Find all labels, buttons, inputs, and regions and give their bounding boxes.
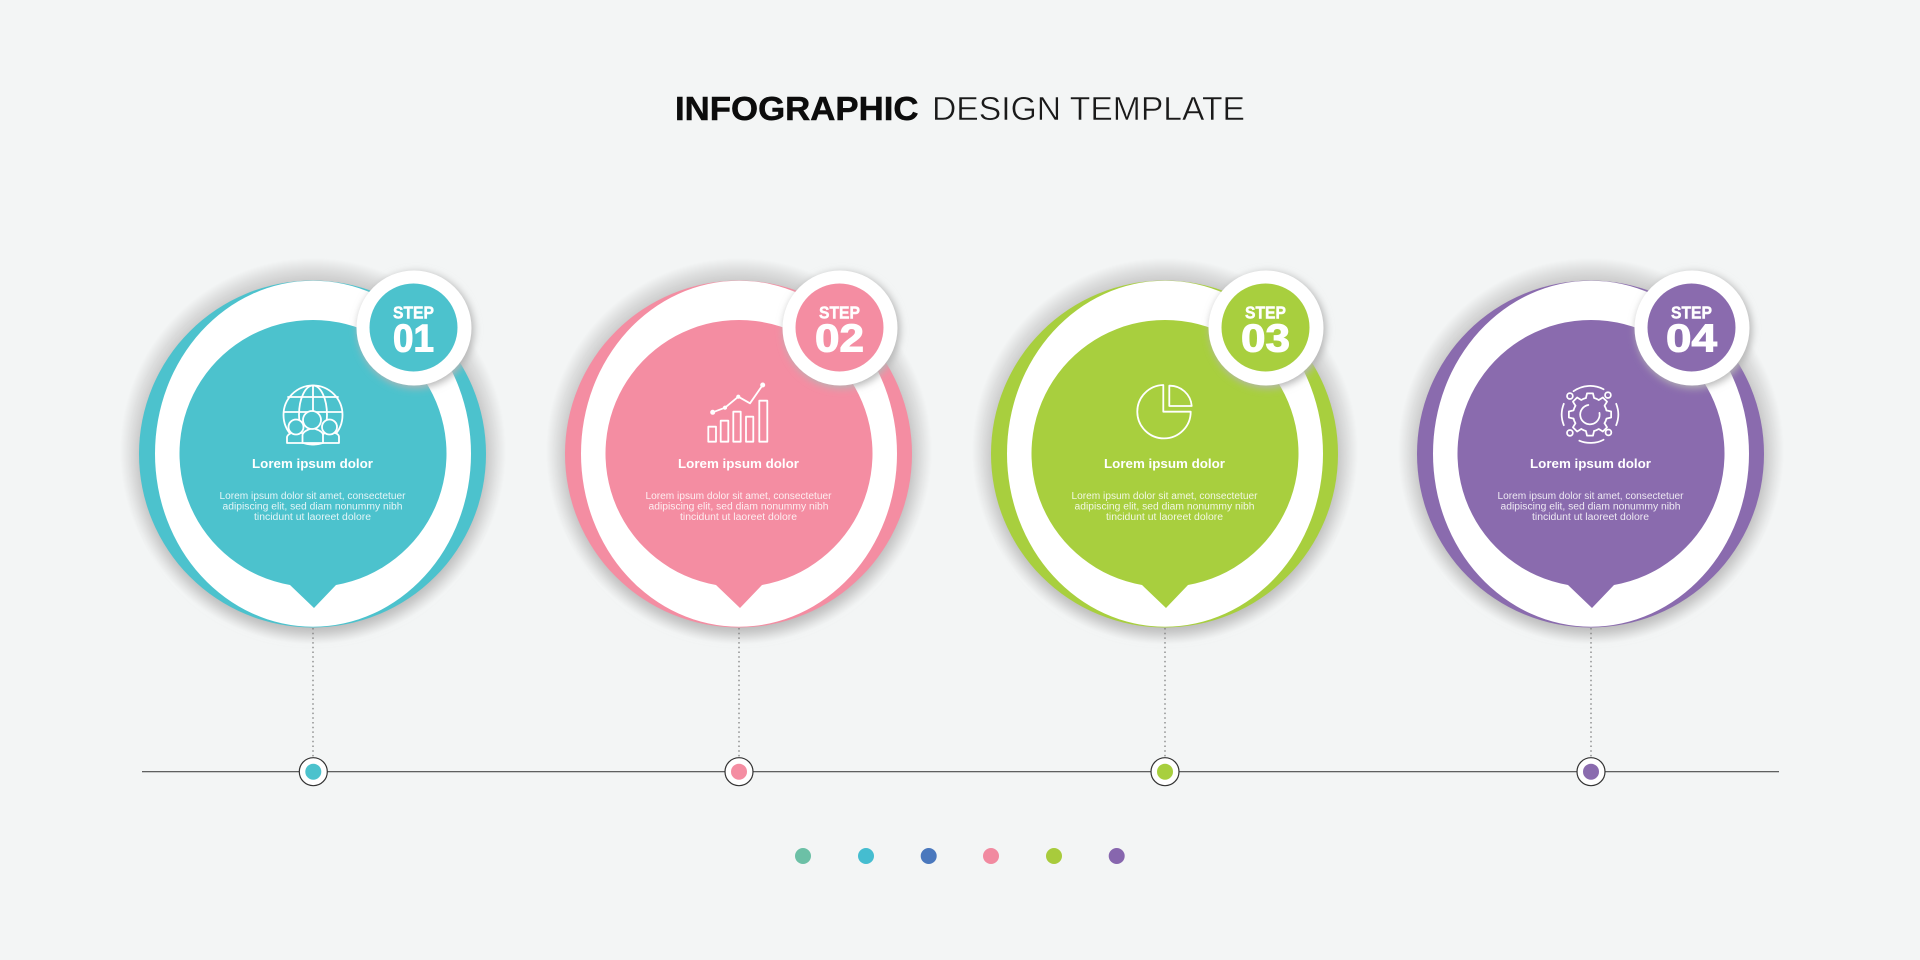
body text: Lorem ipsum dolor sit amet, consectetuer — [646, 491, 832, 502]
panel: step 01 — [120, 258, 506, 786]
white ring — [1433, 281, 1749, 627]
body text: Lorem ipsum dolor sit amet, consectetuer — [1498, 491, 1684, 502]
body text — [220, 491, 406, 523]
step badge — [1208, 270, 1326, 388]
heading: Lorem ipsum dolor — [252, 457, 373, 471]
outer colour disc — [139, 280, 486, 628]
step badge: STEP — [1671, 302, 1712, 322]
timeline node — [1577, 758, 1605, 786]
timeline node — [725, 758, 753, 786]
timeline axis — [142, 771, 1779, 773]
step badge — [782, 270, 900, 388]
step badge: 02 — [815, 318, 864, 361]
heading: Lorem ipsum dolor — [1104, 457, 1225, 471]
icon: bar chart with trend line — [708, 383, 767, 442]
icon: gear with orbit nodes — [1562, 386, 1618, 443]
inner speech bubble — [179, 320, 446, 608]
connector — [312, 628, 314, 757]
body text: adipiscing elit, sed diam nonummy nibh — [1500, 502, 1680, 513]
white ring — [1007, 281, 1323, 627]
white ring — [581, 281, 897, 627]
inner speech bubble — [1032, 320, 1298, 608]
heading: Lorem ipsum dolor — [1530, 457, 1651, 471]
body text — [646, 491, 832, 523]
step badge: STEP — [819, 302, 860, 322]
title — [675, 90, 1245, 127]
step badge: 04 — [1666, 318, 1717, 361]
body text — [1072, 491, 1258, 523]
outer colour disc — [1417, 280, 1764, 628]
body text: tincidunt ut laoreet dolore — [1106, 512, 1223, 523]
connector — [738, 628, 740, 757]
step badge: STEP — [393, 302, 434, 322]
step badge: 01 — [393, 318, 434, 361]
timeline node — [1151, 758, 1179, 786]
step badge — [356, 270, 474, 388]
body text: Lorem ipsum dolor sit amet, consectetuer — [220, 491, 406, 502]
body text: tincidunt ut laoreet dolore — [1532, 512, 1649, 523]
outer colour disc — [565, 280, 912, 628]
title: DESIGN TEMPLATE — [932, 90, 1245, 127]
body text: tincidunt ut laoreet dolore — [680, 512, 797, 523]
body text: adipiscing elit, sed diam nonummy nibh — [1074, 502, 1254, 513]
heading: Lorem ipsum dolor — [678, 457, 799, 471]
white ring — [155, 281, 471, 627]
outer colour disc — [991, 280, 1338, 628]
timeline node — [299, 758, 327, 786]
panel: step 03 — [972, 258, 1358, 786]
icon: globe with people — [284, 386, 342, 444]
inner speech bubble — [1457, 320, 1724, 608]
title: INFOGRAPHIC — [675, 90, 918, 127]
body text: Lorem ipsum dolor sit amet, consectetuer — [1072, 491, 1258, 502]
step badge: STEP — [1245, 302, 1286, 322]
panel: step 02 — [546, 258, 932, 786]
colour palette dots — [795, 848, 1125, 864]
body text — [1498, 491, 1684, 523]
connector — [1164, 628, 1166, 757]
panel: step 04 — [1398, 258, 1784, 786]
body text: tincidunt ut laoreet dolore — [254, 512, 371, 523]
connector — [1590, 628, 1592, 757]
body text: adipiscing elit, sed diam nonummy nibh — [222, 502, 402, 513]
step badge: 03 — [1241, 318, 1290, 361]
step badge — [1634, 270, 1752, 388]
body text: adipiscing elit, sed diam nonummy nibh — [648, 502, 828, 513]
inner speech bubble — [606, 320, 873, 608]
icon: pie chart — [1137, 385, 1192, 438]
